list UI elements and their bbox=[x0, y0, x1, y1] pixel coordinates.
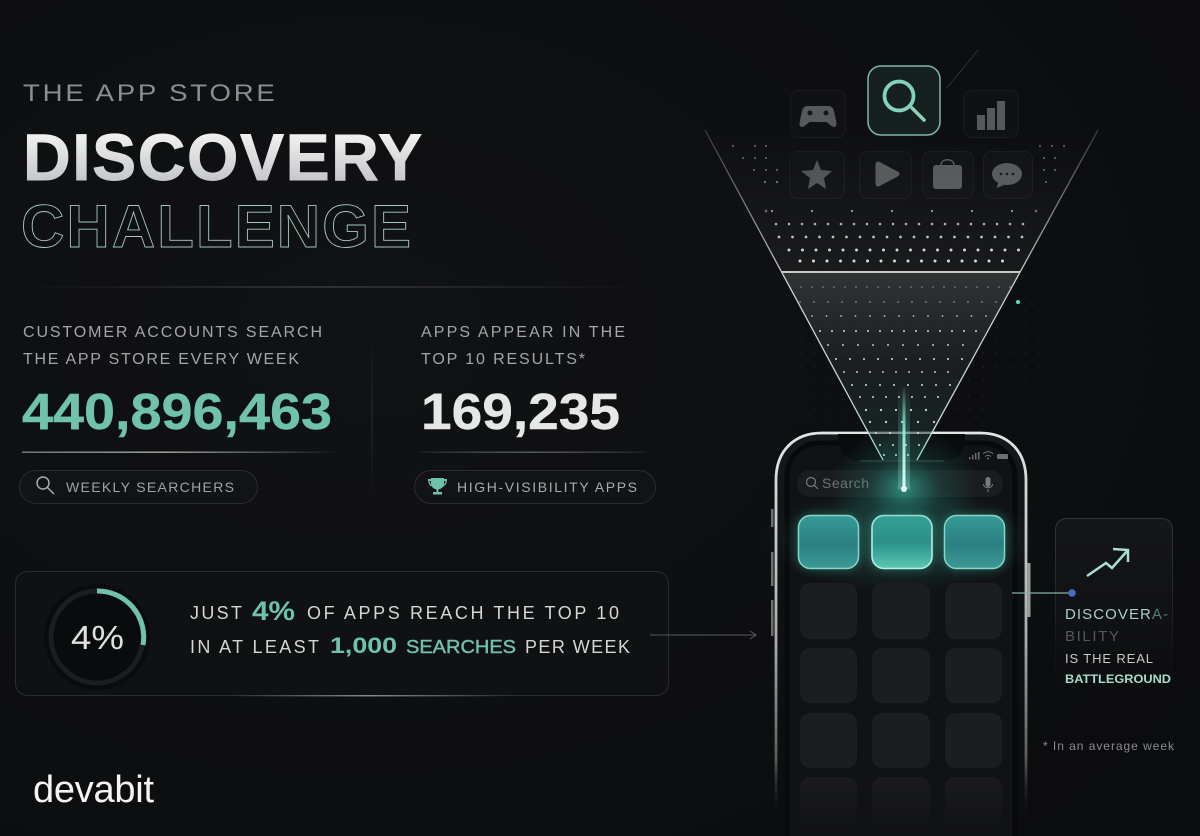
pill: high-visibility apps: HIGH-VISIBILITY APPS bbox=[457, 479, 637, 495]
phone frame bbox=[776, 433, 1026, 815]
callout text: BILITY bbox=[1065, 628, 1119, 645]
stat number: 440,896,463 bbox=[22, 383, 332, 440]
icon grid bbox=[790, 50, 1032, 198]
callout text: OF APPS REACH THE TOP 10 bbox=[307, 603, 619, 623]
callout text: 4% bbox=[252, 596, 295, 626]
phone bbox=[762, 433, 1042, 836]
title: discovery: DISCOVERY bbox=[23, 120, 422, 194]
icon tile: bars bbox=[964, 90, 1018, 138]
pill: high-visibility apps bbox=[414, 470, 656, 504]
icon tile: play bbox=[860, 152, 912, 198]
spark dot bbox=[1016, 300, 1020, 304]
callout text: 1,000 bbox=[330, 633, 397, 658]
search bar bbox=[797, 470, 1003, 497]
stat label: TOP 10 RESULTS* bbox=[421, 351, 585, 368]
callout text: PER WEEK bbox=[525, 637, 630, 657]
notch bbox=[838, 434, 965, 461]
glow behind highlighted tiles bbox=[762, 488, 1042, 592]
highlighted result tiles bbox=[798, 516, 1004, 568]
connector line bbox=[1012, 592, 1072, 594]
status icons bbox=[969, 452, 1008, 460]
stat label: THE APP STORE EVERY WEEK bbox=[23, 351, 299, 368]
footnote: * In an average week bbox=[1043, 739, 1175, 753]
callout text: SEARCHES bbox=[406, 637, 516, 657]
arrow to phone bbox=[650, 631, 756, 639]
connector dot bbox=[1068, 589, 1076, 597]
panel: 4% callout bbox=[16, 572, 668, 696]
stat: weekly searchers bbox=[20, 324, 338, 504]
icon tile: chat bbox=[984, 152, 1032, 198]
icon: trophy bbox=[428, 478, 447, 494]
callout text: JUST bbox=[190, 603, 242, 623]
icon: magnifier bbox=[37, 477, 54, 494]
callout text bbox=[1065, 606, 1171, 686]
callout text: IS THE REAL bbox=[1065, 651, 1153, 666]
donut chart: 4% bbox=[44, 584, 150, 690]
pill: weekly searchers bbox=[20, 470, 258, 504]
icon tile: search highlighted bbox=[868, 66, 940, 135]
callout text: IN AT LEAST bbox=[190, 637, 319, 657]
callout text: BATTLEGROUND bbox=[1065, 672, 1171, 686]
tile halos bbox=[798, 515, 1005, 569]
callout text: DISCOVERA- bbox=[1065, 606, 1168, 623]
callout card: discoverability bbox=[1012, 518, 1172, 700]
stat number: 169,235 bbox=[421, 383, 620, 440]
eyebrow heading: THE APP STORE bbox=[23, 81, 275, 107]
faint dot field bbox=[716, 226, 1138, 452]
logo: devabit bbox=[33, 769, 154, 811]
light beam bbox=[829, 385, 979, 548]
pill: weekly searchers: WEEKLY SEARCHERS bbox=[66, 479, 234, 495]
donut chart: 4%: 4% bbox=[71, 619, 124, 656]
stat label: APPS APPEAR IN THE bbox=[421, 324, 625, 341]
stat label bbox=[23, 324, 322, 368]
icon tile: bag bbox=[922, 152, 974, 198]
muted result tiles bbox=[800, 583, 1002, 830]
search bar: Search bbox=[822, 475, 869, 491]
stat label bbox=[421, 324, 625, 368]
title: challenge outlined: CHALLENGE bbox=[21, 193, 411, 260]
icon: trending arrow bbox=[1087, 549, 1128, 576]
funnel bbox=[705, 130, 1098, 460]
stat label: CUSTOMER ACCOUNTS SEARCH bbox=[23, 324, 322, 341]
icon tile: star bbox=[790, 152, 844, 198]
callout text bbox=[190, 596, 630, 658]
icon tile: gamepad bbox=[790, 90, 846, 138]
stat: high-visibility apps bbox=[414, 324, 656, 504]
